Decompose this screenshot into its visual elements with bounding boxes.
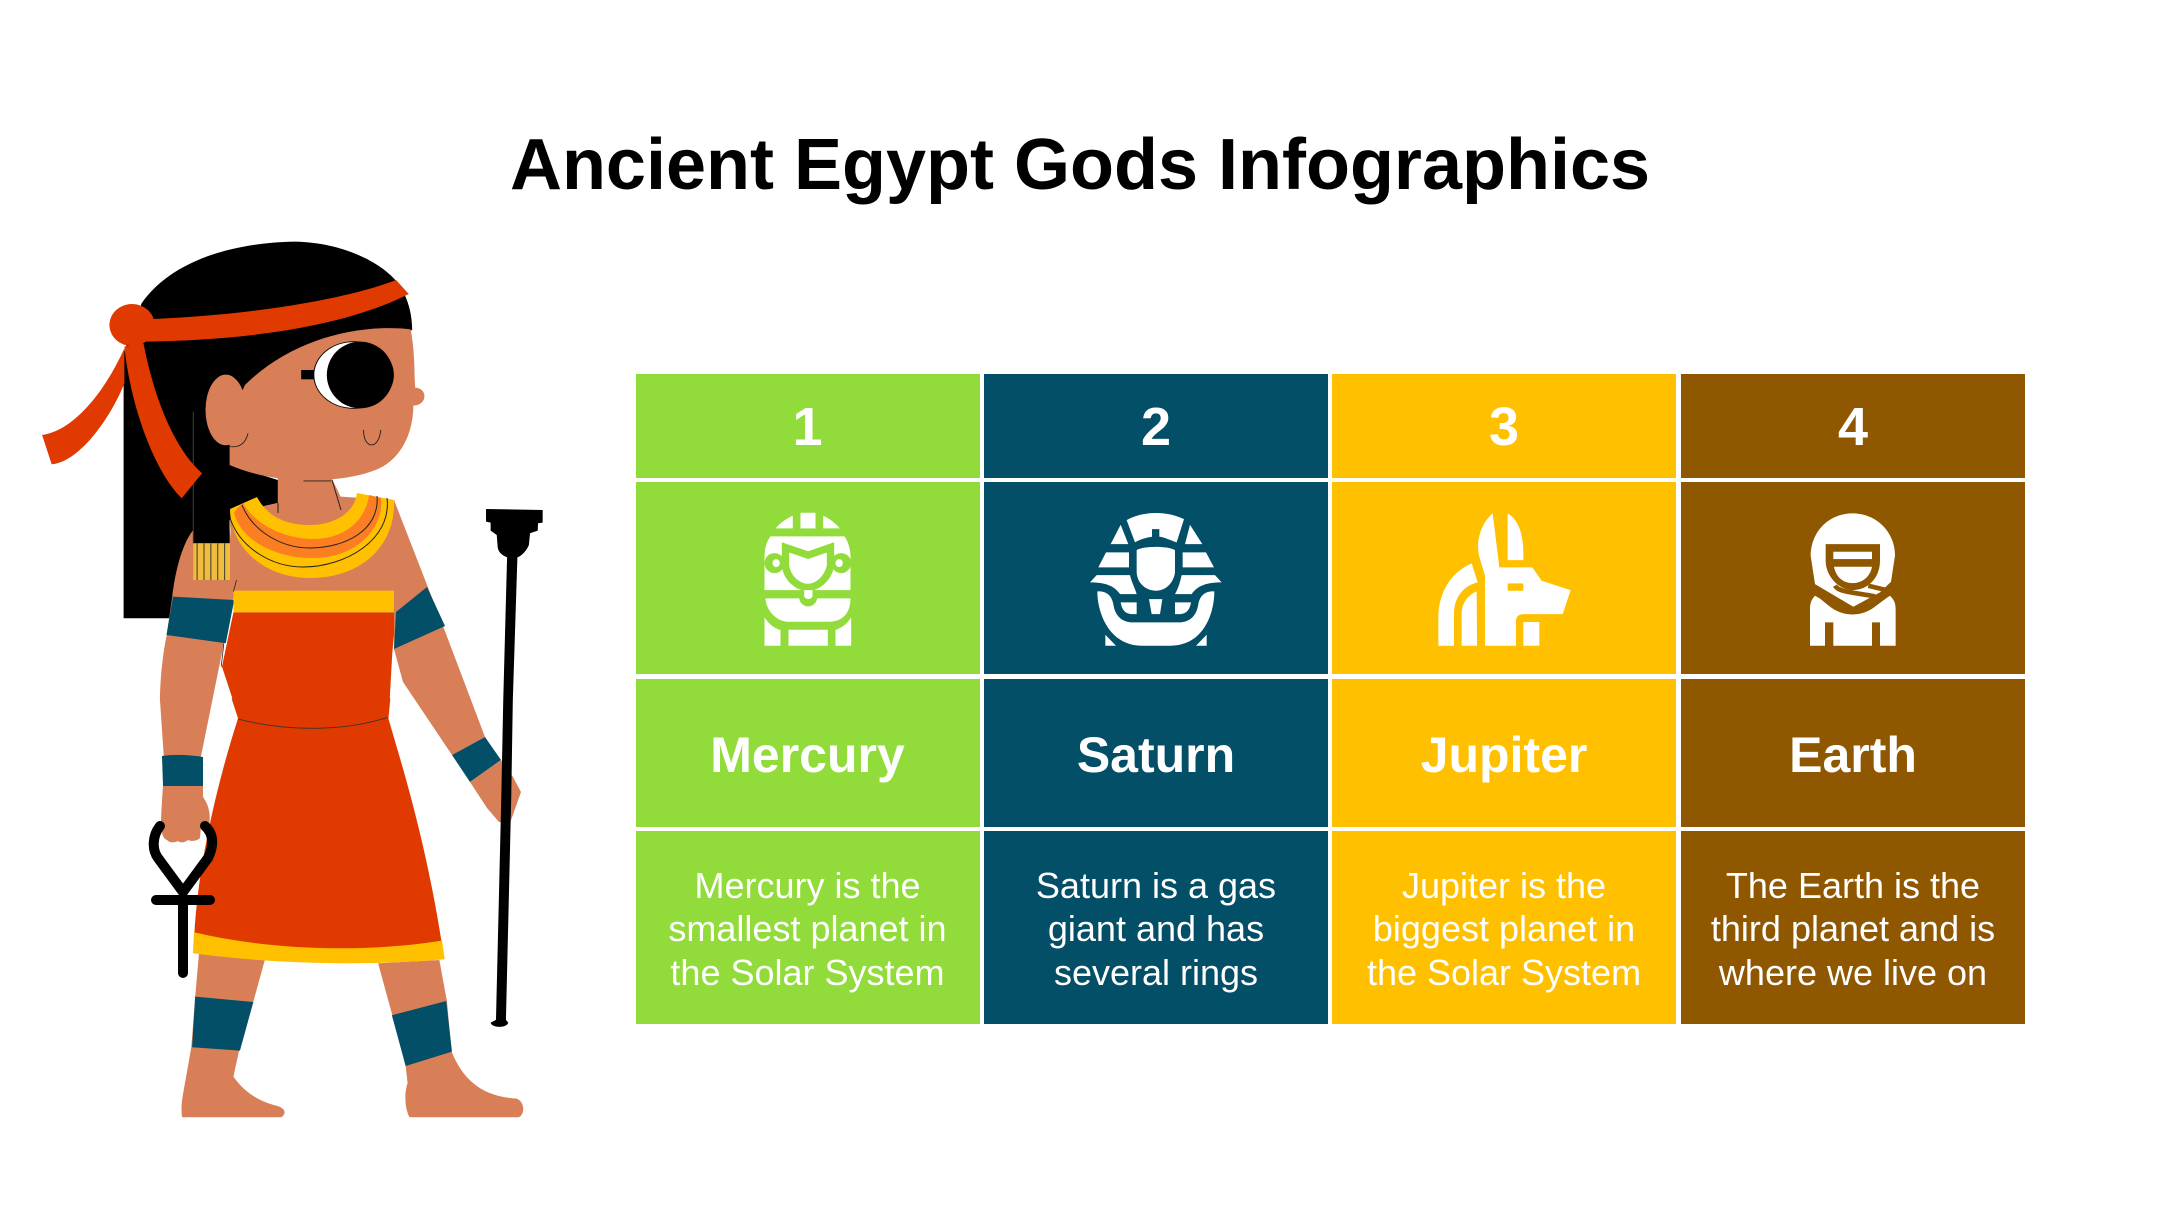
- left wristband and hand: [161, 755, 210, 842]
- planet name: [984, 679, 1328, 827]
- headband with knot and ribbons: [42, 280, 409, 498]
- title: Ancient Egypt Gods Infographics: [510, 125, 1650, 205]
- description: [1332, 831, 1676, 1024]
- planet name: Saturn: [1077, 726, 1235, 782]
- description: Mercury is the: [694, 865, 921, 906]
- icon: pharaoh sarcophagus: [636, 482, 980, 674]
- panel: column 1 Mercury: [636, 374, 980, 1024]
- number 4: 4: [1838, 397, 1868, 457]
- panel: column 3 Jupiter: [1332, 374, 1676, 1024]
- icon: Tutankhamun mask: [984, 482, 1328, 674]
- description: smallest planet in: [668, 908, 947, 949]
- planet name: [636, 679, 980, 827]
- icon: Anubis: [1332, 482, 1676, 674]
- description: giant and has: [1048, 908, 1264, 949]
- staff: [486, 509, 543, 1027]
- description: where we live on: [1719, 952, 1987, 993]
- planet name: [1332, 679, 1676, 827]
- description: the Solar System: [1367, 952, 1641, 993]
- description: the Solar System: [670, 952, 945, 993]
- planet name: Earth: [1789, 726, 1917, 782]
- description: Jupiter is the: [1402, 865, 1606, 906]
- description: biggest planet in: [1373, 908, 1635, 949]
- head: face, ear, eye, mouth: [193, 328, 424, 543]
- description: [1681, 831, 2025, 1024]
- number 2: [984, 374, 1328, 478]
- number 1: 1: [792, 397, 823, 457]
- description: [984, 831, 1328, 1024]
- number 3: 3: [1489, 397, 1519, 457]
- number 3: [1332, 374, 1676, 478]
- panel: column 4 Earth: [1681, 374, 2025, 1024]
- panel: column 2 Saturn: [984, 374, 1328, 1024]
- planet name: [1681, 679, 2025, 827]
- ankh: [151, 826, 215, 978]
- description: Saturn is a gas: [1036, 865, 1276, 906]
- description: third planet and is: [1711, 908, 1995, 949]
- right arm, wristband and hand: [394, 500, 521, 823]
- number 2: 2: [1141, 397, 1171, 457]
- hair: [124, 242, 412, 618]
- illustration: Egyptian figure with ankh and staff: [42, 242, 543, 1118]
- upper body: arm, chest, hair lock, dress top: [160, 412, 397, 702]
- description: The Earth is the: [1726, 865, 1980, 906]
- planet name: Mercury: [710, 726, 905, 782]
- description: [636, 831, 980, 1024]
- description: several rings: [1054, 952, 1258, 993]
- lower body: legs, dress skirt, left forearm: [160, 698, 523, 1117]
- number 1: [636, 374, 980, 478]
- icon: veiled figure: [1681, 482, 2025, 674]
- collar necklace: [230, 480, 394, 578]
- number 4: [1681, 374, 2025, 478]
- planet name: Jupiter: [1421, 726, 1587, 782]
